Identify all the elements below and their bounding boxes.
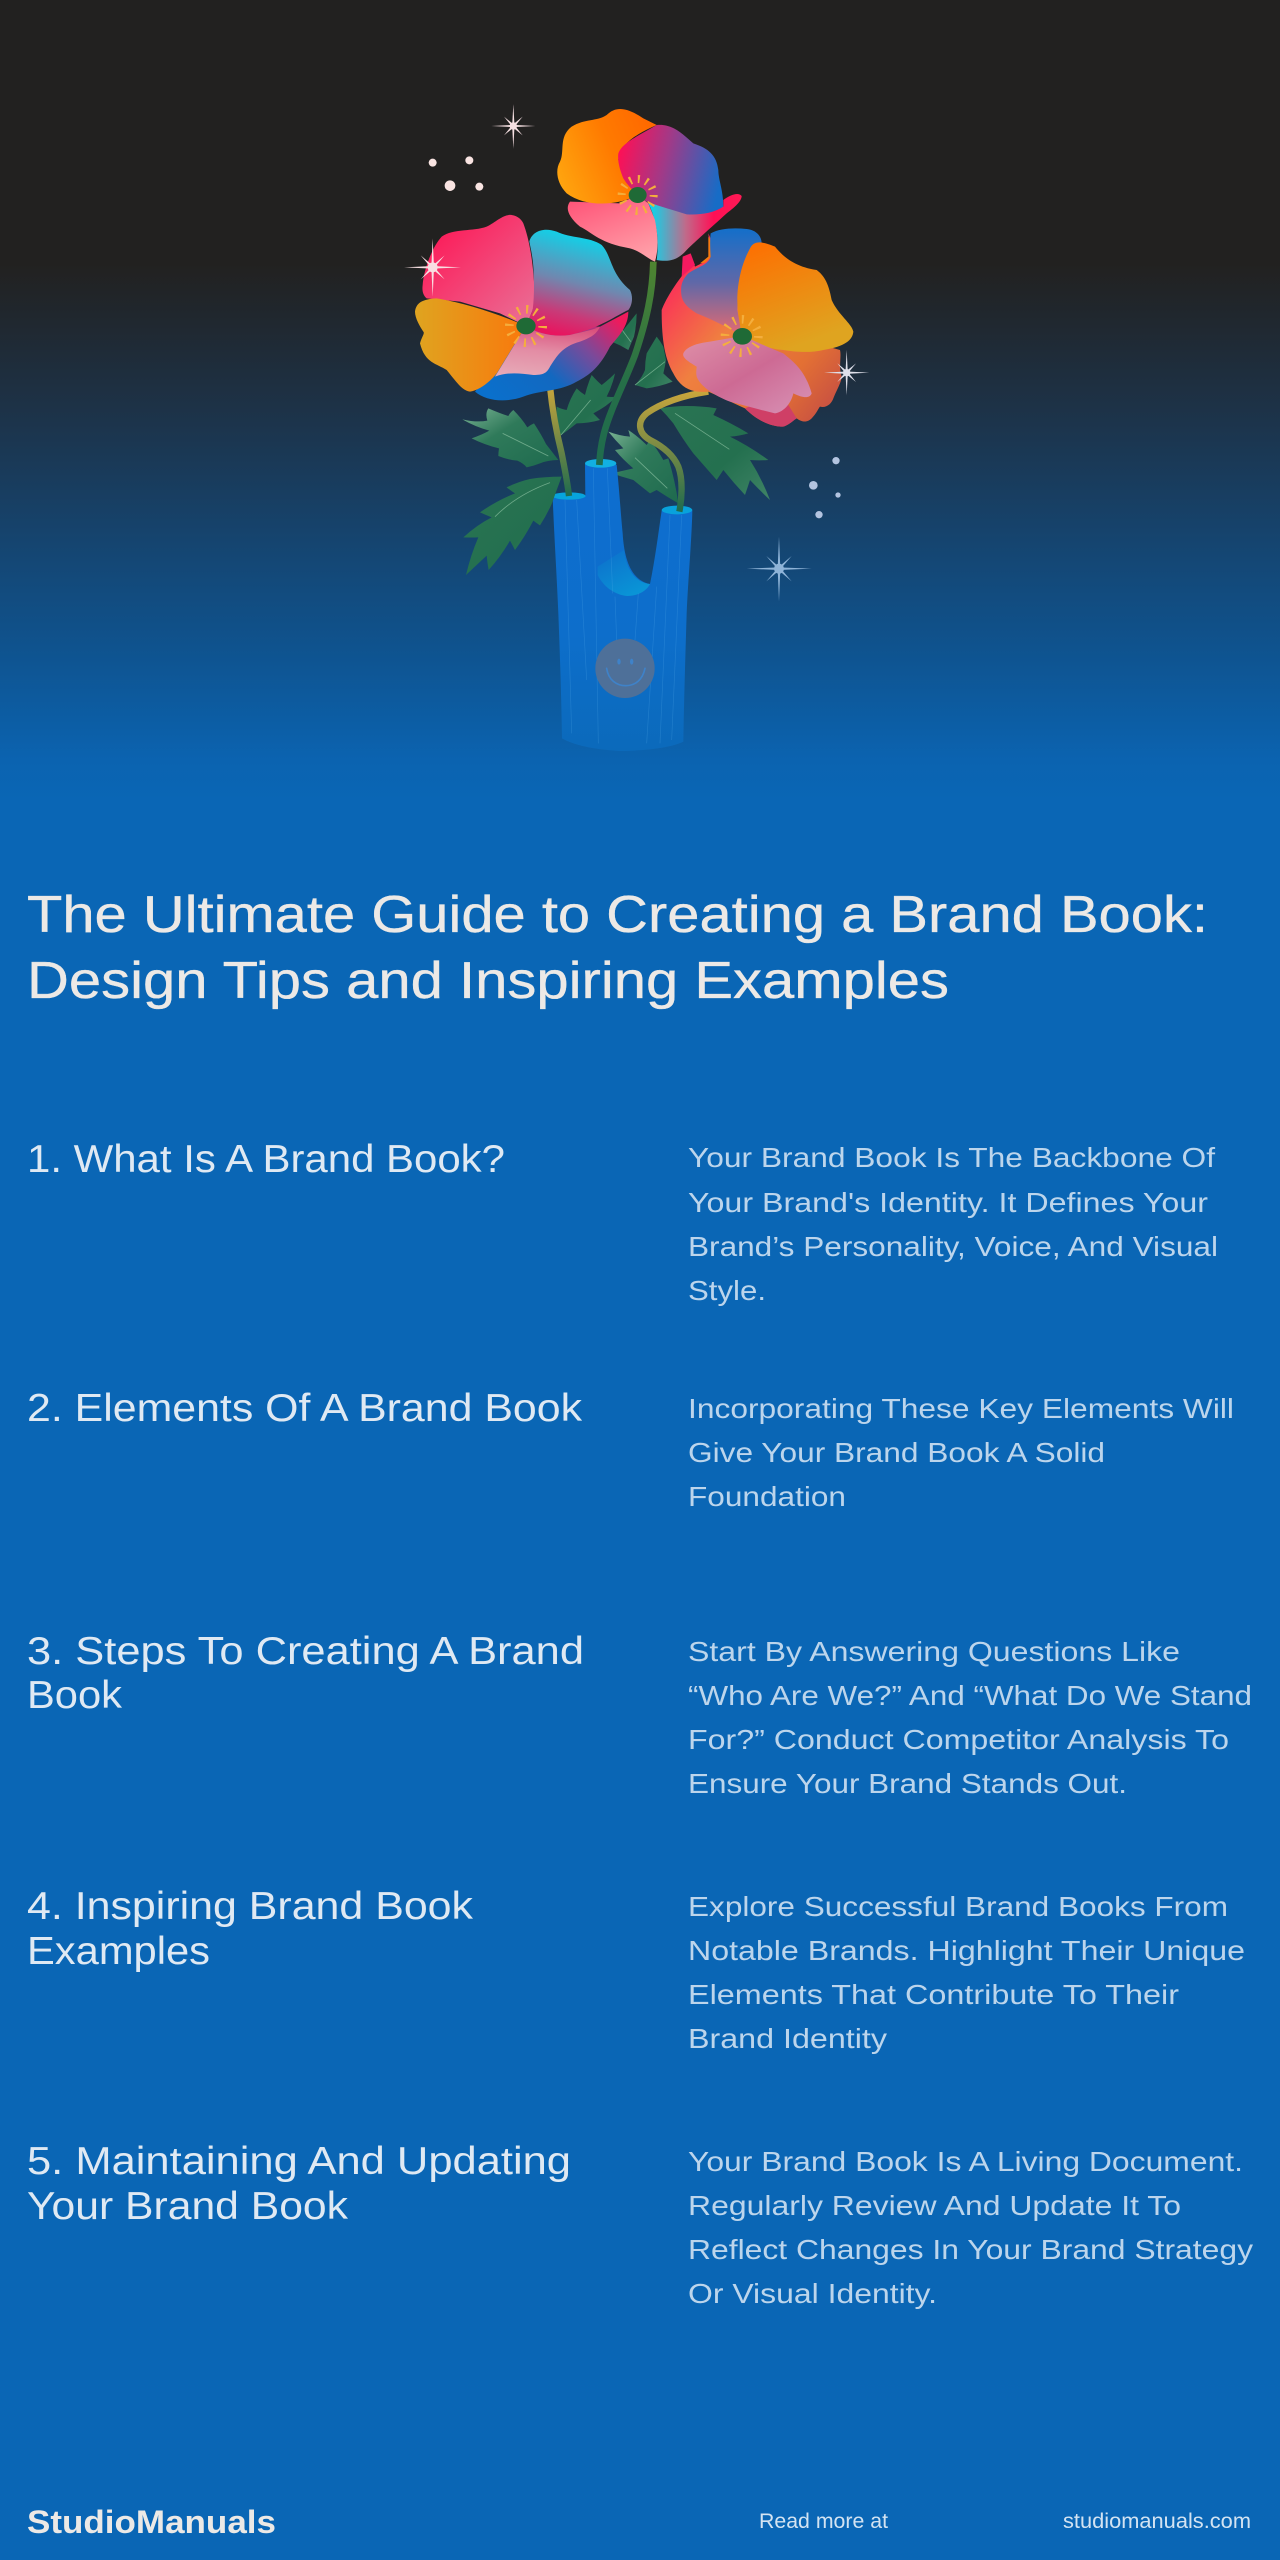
body 5: Reflect Changes In Your Brand Strategy	[688, 2234, 1253, 2265]
body 3: Start By Answering Questions Like	[688, 1636, 1180, 1667]
vase interior crescent	[598, 550, 650, 596]
body 3	[688, 1636, 1252, 1799]
body 4: Elements That Contribute To Their	[688, 1979, 1179, 2010]
title: The Ultimate Guide to Creating a Brand Book:	[27, 886, 1208, 944]
heading 2: 2. Elements Of A Brand Book	[27, 1387, 583, 1430]
flower: top poppy	[557, 109, 742, 262]
section 1	[27, 1138, 1218, 1306]
illustration: poppy bouquet in a blue vase	[404, 104, 869, 751]
heading 4: Examples	[27, 1930, 210, 1973]
body 1: Your Brand Book Is The Backbone Of	[688, 1142, 1215, 1173]
title: Design Tips and Inspiring Examples	[27, 952, 949, 1010]
brand name: StudioManuals	[27, 2504, 276, 2540]
vase ribs	[565, 468, 682, 743]
body 2	[688, 1393, 1234, 1512]
back petal magenta edge	[745, 400, 797, 427]
leaf behind vase	[608, 430, 678, 503]
section 3	[27, 1630, 1252, 1799]
body 1: Your Brand's Identity. It Defines Your	[688, 1187, 1208, 1218]
body 3: “Who Are We?” And “What Do We Stand	[688, 1680, 1252, 1711]
flower: left poppy	[415, 215, 632, 400]
sparkle stars	[404, 104, 869, 601]
website: studiomanuals.com	[1063, 2510, 1251, 2533]
section 5	[27, 2140, 1253, 2309]
body 5	[688, 2146, 1253, 2309]
heading 5	[27, 2140, 571, 2228]
title	[27, 886, 1208, 1010]
heading 5: 5. Maintaining And Updating	[27, 2140, 571, 2183]
heading 3	[27, 1630, 584, 1717]
body 4: Notable Brands. Highlight Their Unique	[688, 1935, 1245, 1966]
vase	[552, 459, 692, 751]
leaves	[462, 313, 770, 575]
body 5: Regularly Review And Update It To	[688, 2190, 1181, 2221]
read more label: Read more at	[759, 2510, 888, 2533]
body 3: For?” Conduct Competitor Analysis To	[688, 1724, 1229, 1755]
heading 3: 3. Steps To Creating A Brand	[27, 1630, 584, 1673]
leaf veins	[495, 329, 729, 517]
body 2: Foundation	[688, 1481, 846, 1512]
heading 5: Your Brand Book	[27, 2185, 349, 2228]
dots	[429, 156, 841, 518]
stems	[550, 262, 708, 512]
section 4	[27, 1885, 1245, 2054]
body 1: Brand’s Personality, Voice, And Visual	[688, 1231, 1218, 1262]
footer	[27, 2504, 1251, 2540]
body 5: Or Visual Identity.	[688, 2278, 937, 2309]
heading 4: 4. Inspiring Brand Book	[27, 1885, 474, 1928]
body 2: Give Your Brand Book A Solid	[688, 1437, 1105, 1468]
body 1	[688, 1142, 1218, 1306]
body 2: Incorporating These Key Elements Will	[688, 1393, 1234, 1424]
body 5: Your Brand Book Is A Living Document.	[688, 2146, 1243, 2177]
body 4	[688, 1891, 1245, 2054]
heading 4	[27, 1885, 474, 1973]
body 4: Brand Identity	[688, 2023, 887, 2054]
body 1: Style.	[688, 1275, 766, 1306]
heading 3: Book	[27, 1674, 123, 1717]
vase openings	[552, 492, 586, 500]
body 3: Ensure Your Brand Stands Out.	[688, 1768, 1127, 1799]
section 2	[27, 1387, 1234, 1512]
heading 1: 1. What Is A Brand Book?	[27, 1138, 505, 1181]
flower: right poppy	[662, 228, 853, 427]
body 4: Explore Successful Brand Books From	[688, 1891, 1228, 1922]
icon: smiley	[595, 639, 655, 698]
